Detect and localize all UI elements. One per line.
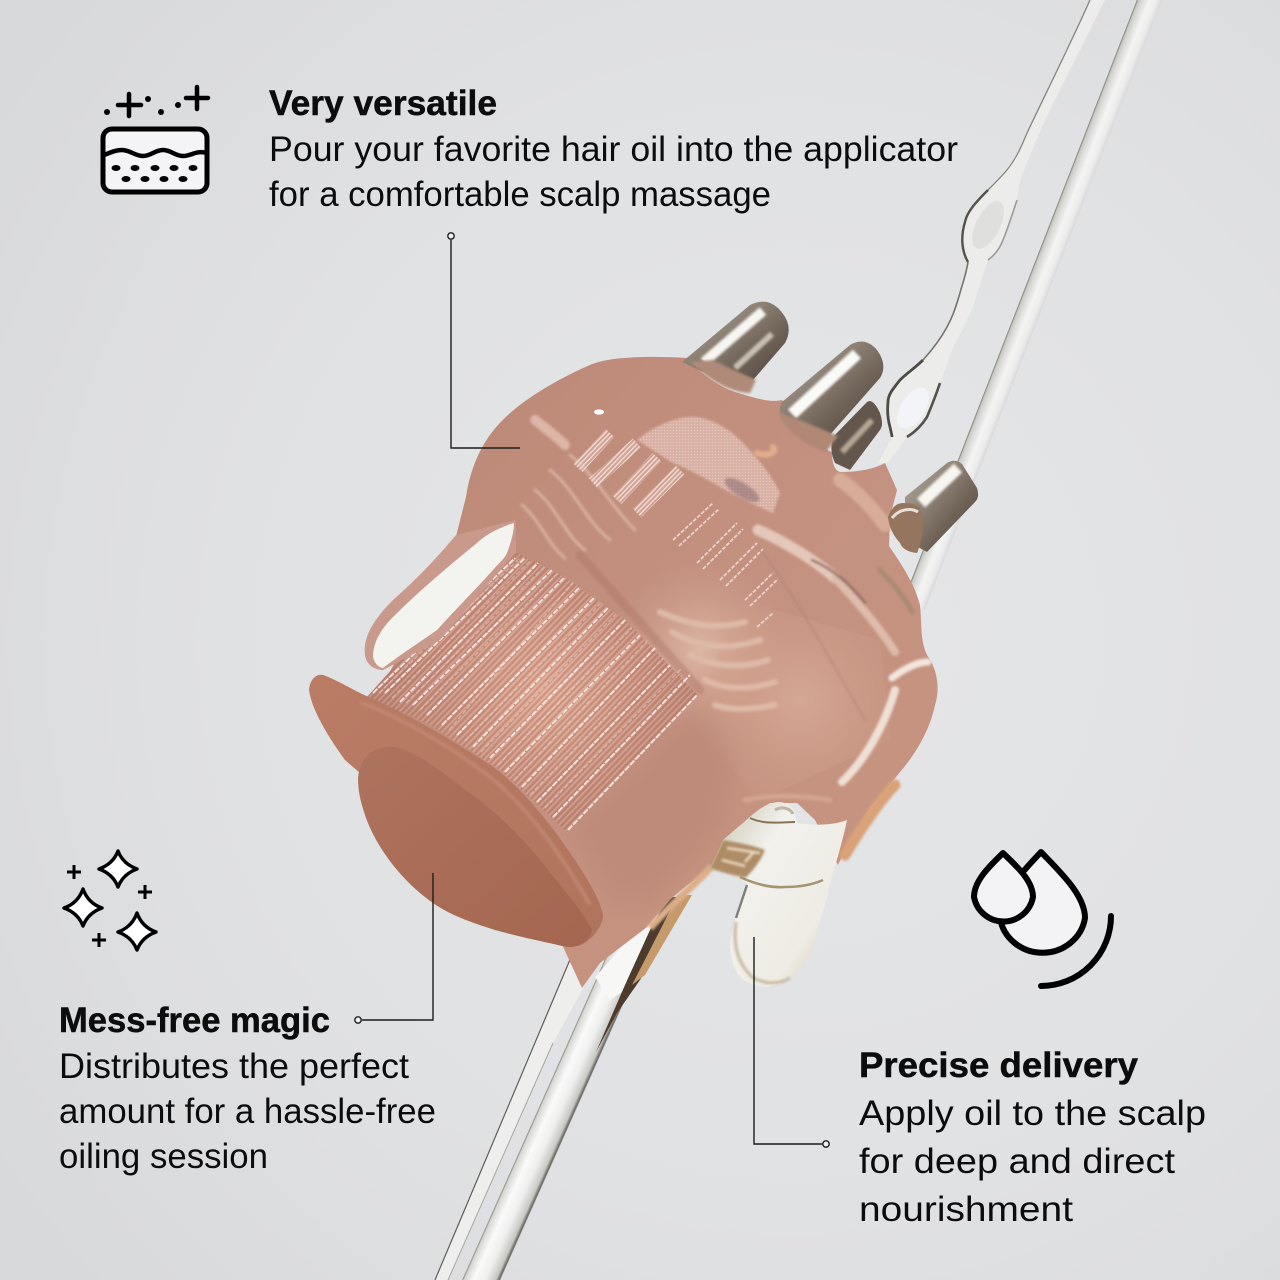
icon: oil drops bbox=[974, 852, 1111, 986]
dome bbox=[358, 747, 592, 947]
text: very versatile: for a comfortable scalp massage bbox=[269, 175, 771, 214]
text: mess-free magic: Mess-free magic bbox=[59, 1001, 330, 1040]
pin 3 bbox=[831, 401, 882, 470]
golden glass fold bbox=[710, 840, 765, 878]
text: very versatile bbox=[269, 84, 958, 214]
text: precise delivery: Apply oil to the scalp bbox=[859, 1094, 1206, 1133]
lower ribbed section bbox=[367, 553, 698, 832]
text: mess-free magic bbox=[59, 1001, 436, 1176]
metal pins bbox=[682, 302, 978, 553]
leader line: precise delivery bbox=[754, 937, 829, 1147]
text: very versatile: Pour your favorite hair oil into the applicator bbox=[269, 130, 958, 169]
leader line: very versatile bbox=[448, 233, 520, 448]
icon: sparkles bbox=[64, 851, 156, 950]
dark spot bbox=[721, 473, 763, 507]
lower shadow bars bbox=[570, 700, 735, 905]
right side shine bbox=[690, 600, 890, 800]
text: very versatile: Very versatile bbox=[269, 84, 497, 123]
pink-coated white drip bbox=[365, 520, 516, 670]
text: precise delivery: Precise delivery bbox=[859, 1046, 1139, 1085]
clear oil drip bbox=[710, 802, 847, 987]
text: precise delivery: for deep and direct bbox=[859, 1142, 1175, 1181]
text: mess-free magic: Distributes the perfect bbox=[59, 1047, 409, 1086]
oil rim strip bbox=[650, 866, 712, 928]
base brim and dome bbox=[309, 675, 603, 947]
sparkle patch bbox=[637, 417, 780, 513]
applicator bbox=[367, 357, 938, 988]
pin 4 bbox=[888, 461, 978, 553]
lit centre of body bbox=[610, 560, 790, 740]
text: precise delivery bbox=[859, 1046, 1206, 1229]
leader line: mess-free magic bbox=[355, 873, 433, 1023]
brim edge highlight bbox=[360, 702, 590, 905]
oil strand and drops bbox=[878, 0, 1105, 463]
oil-coated body bbox=[380, 357, 938, 988]
upper glass rod bbox=[903, 0, 1171, 610]
text: mess-free magic: oiling session bbox=[59, 1137, 268, 1176]
icon: scalp layers bbox=[103, 87, 208, 192]
refraction bands bbox=[522, 420, 928, 855]
upper ridge flashes bbox=[578, 433, 778, 627]
lower glass rods bbox=[435, 895, 692, 1280]
text: precise delivery: nourishment bbox=[859, 1190, 1073, 1229]
top highlight bbox=[594, 409, 604, 415]
text: mess-free magic: amount for a hassle-free bbox=[59, 1092, 436, 1131]
pin 2 bbox=[778, 341, 883, 452]
pin 1 bbox=[682, 302, 789, 393]
brim bbox=[309, 675, 603, 946]
